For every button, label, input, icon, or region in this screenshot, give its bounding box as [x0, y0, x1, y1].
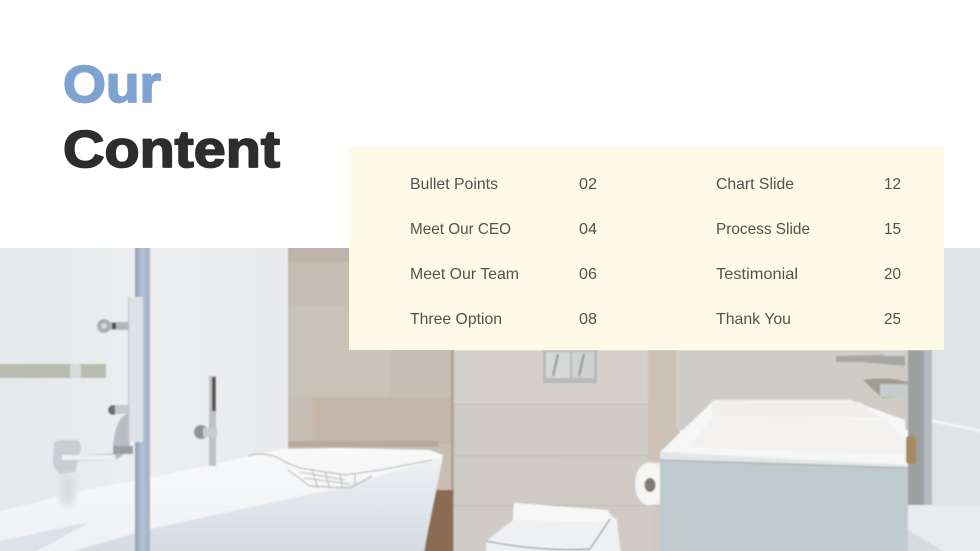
sink faucet	[836, 350, 908, 398]
left column entries: 02	[579, 176, 597, 193]
left column entries: 04	[579, 221, 597, 238]
left column entries: Three Option	[410, 311, 502, 328]
bathtub	[0, 448, 443, 551]
right column entries	[716, 176, 901, 328]
right column entries: Thank You	[716, 311, 791, 328]
toilet	[486, 503, 621, 551]
flush plate	[543, 350, 597, 383]
left column entries: 06	[579, 266, 597, 283]
title word: Content: Content	[63, 121, 280, 179]
bathroom photo	[0, 244, 980, 551]
title	[63, 56, 280, 179]
vanity unit	[660, 400, 910, 551]
right column entries: 15	[884, 221, 901, 238]
beige tile wall	[288, 244, 454, 551]
rear grey tile wall	[451, 350, 916, 551]
towel bar	[0, 364, 106, 378]
left column entries	[410, 176, 597, 328]
wood under bathtub	[424, 490, 453, 551]
glass door post	[128, 244, 150, 551]
panel background	[349, 146, 944, 350]
right column entries: 12	[884, 176, 901, 193]
left column entries: 08	[579, 311, 597, 328]
right column entries: Chart Slide	[716, 176, 794, 193]
hand shower	[194, 376, 217, 466]
left white wall	[0, 248, 288, 512]
right column entries: Process Slide	[716, 221, 810, 238]
left column entries: Bullet Points	[410, 176, 498, 193]
glass door knobs	[97, 319, 128, 415]
wall faucet	[53, 414, 133, 505]
right column entries: Testimonial	[716, 266, 798, 283]
door	[906, 244, 980, 551]
right column entries: 25	[884, 311, 901, 328]
soap basket	[248, 454, 432, 489]
left column entries: Meet Our Team	[410, 266, 519, 283]
right column entries: 20	[884, 266, 901, 283]
title word: Our: Our	[63, 56, 161, 114]
toilet paper roll	[635, 462, 663, 506]
panel: table of contents	[349, 146, 944, 350]
left column entries: Meet Our CEO	[410, 221, 511, 238]
